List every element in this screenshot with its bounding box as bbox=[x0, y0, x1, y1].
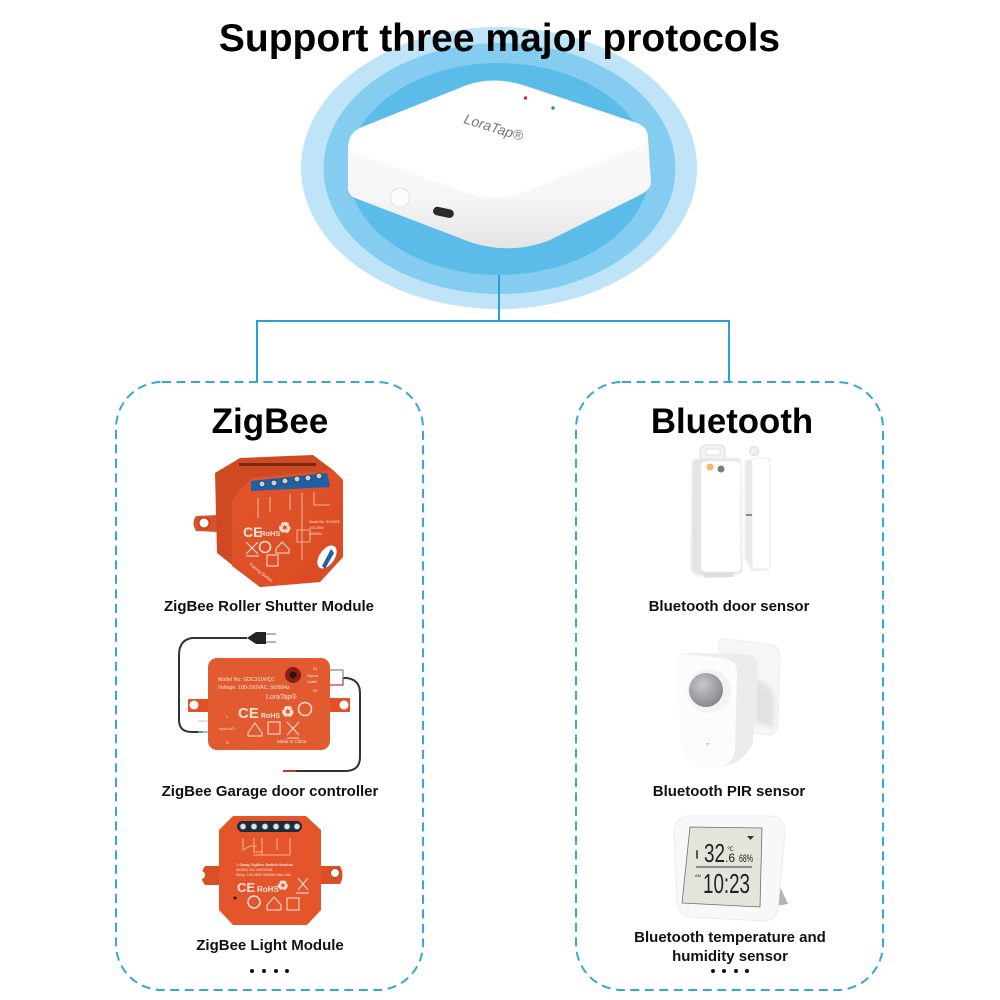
more dots bbox=[250, 969, 289, 973]
connector lines bbox=[257, 275, 729, 381]
icon: thermometer hygrometer: AM bbox=[695, 873, 701, 878]
icon: roller shutter module: CE bbox=[243, 524, 262, 540]
icon: PIR sensor bbox=[675, 639, 780, 767]
icon: roller shutter module: ♻ bbox=[278, 520, 291, 537]
icon: roller shutter module: 100-250V bbox=[309, 526, 325, 530]
icon: garage door controller: S1 bbox=[313, 667, 318, 671]
icon: garage door controller: Cable bbox=[307, 680, 317, 684]
signal rings behind hub bbox=[301, 27, 697, 309]
icon: garage door controller: Input AC~ bbox=[219, 726, 237, 731]
icon: garage door controller: L bbox=[226, 714, 229, 719]
panel: ZigBee bbox=[116, 382, 423, 990]
label: door sensor: Bluetooth door sensor bbox=[649, 598, 810, 615]
icon: garage door controller: Made In China bbox=[277, 739, 307, 744]
icon: garage door controller: Voltage: 100-250VAC, 50/60Hz bbox=[218, 685, 290, 691]
icon: garage door controller: S2 bbox=[313, 689, 318, 693]
icon: thermometer hygrometer: ℃ bbox=[727, 847, 734, 853]
icon: light module bbox=[197, 816, 342, 925]
icon: light module: ♻ bbox=[277, 878, 289, 893]
icon: thermometer hygrometer: .6 bbox=[725, 851, 735, 865]
label: roller shutter: ZigBee Roller Shutter Module bbox=[164, 598, 374, 615]
icon: garage door controller: CE bbox=[238, 705, 259, 722]
icon: garage door controller: RoHS bbox=[261, 713, 280, 720]
more dots bbox=[711, 969, 749, 973]
icon: roller shutter module: Model No: SCM029 bbox=[309, 520, 340, 524]
icon: garage door controller bbox=[179, 632, 360, 771]
icon: garage door controller: N bbox=[226, 740, 229, 745]
hub LED blue bbox=[551, 106, 555, 110]
label: light module: ZigBee Light Module bbox=[196, 937, 344, 954]
icon: roller shutter module: 50/60Hz bbox=[309, 532, 322, 536]
icon: garage door controller: ♻ bbox=[281, 704, 294, 721]
icon: roller shutter module: Pairing Button bbox=[248, 562, 274, 583]
hub USB port bbox=[432, 206, 455, 219]
icon: roller shutter module bbox=[194, 455, 343, 587]
icon: light module: MODEL NO: WHS0028 bbox=[236, 868, 272, 872]
icon: garage door controller: LoraTap® bbox=[266, 693, 297, 701]
label: PIR sensor: Bluetooth PIR sensor bbox=[653, 783, 805, 800]
icon: thermometer hygrometer: 68% bbox=[739, 853, 753, 865]
label: temperature sensor line 2: humidity sensor bbox=[672, 948, 788, 965]
panel: Bluetooth bbox=[576, 382, 883, 990]
icon: thermometer hygrometer: 32 bbox=[704, 838, 725, 868]
hub button bbox=[390, 188, 410, 207]
icon: light module: 1 Gang ZigBee Switch Module bbox=[236, 862, 294, 867]
icon: thermometer hygrometer bbox=[674, 816, 788, 921]
label: garage controller: ZigBee Garage door controller bbox=[162, 783, 379, 800]
icon: light module: RoHS bbox=[257, 885, 279, 894]
hub brand: LoraTap® bbox=[462, 111, 526, 144]
icon: door sensor bbox=[691, 445, 770, 578]
icon: roller shutter module: RoHS bbox=[260, 529, 280, 538]
heading: ZigBee: ZigBee bbox=[212, 402, 328, 441]
icon: light module: CE bbox=[237, 880, 255, 895]
hub device bbox=[348, 80, 651, 248]
label: temperature sensor: Bluetooth temperature and bbox=[634, 929, 826, 946]
icon: light module: Relay: 100-250V 50/60Hz Max 16A bbox=[236, 873, 292, 877]
icon: garage door controller: Signal bbox=[307, 674, 318, 678]
hub LED red bbox=[524, 96, 527, 100]
icon: thermometer hygrometer: 10:23 bbox=[703, 868, 750, 899]
heading: Bluetooth: Bluetooth bbox=[651, 402, 813, 441]
title: Support three major protocols bbox=[219, 17, 780, 60]
icon: garage door controller: Model No: GDC311WQ1 bbox=[218, 677, 275, 683]
